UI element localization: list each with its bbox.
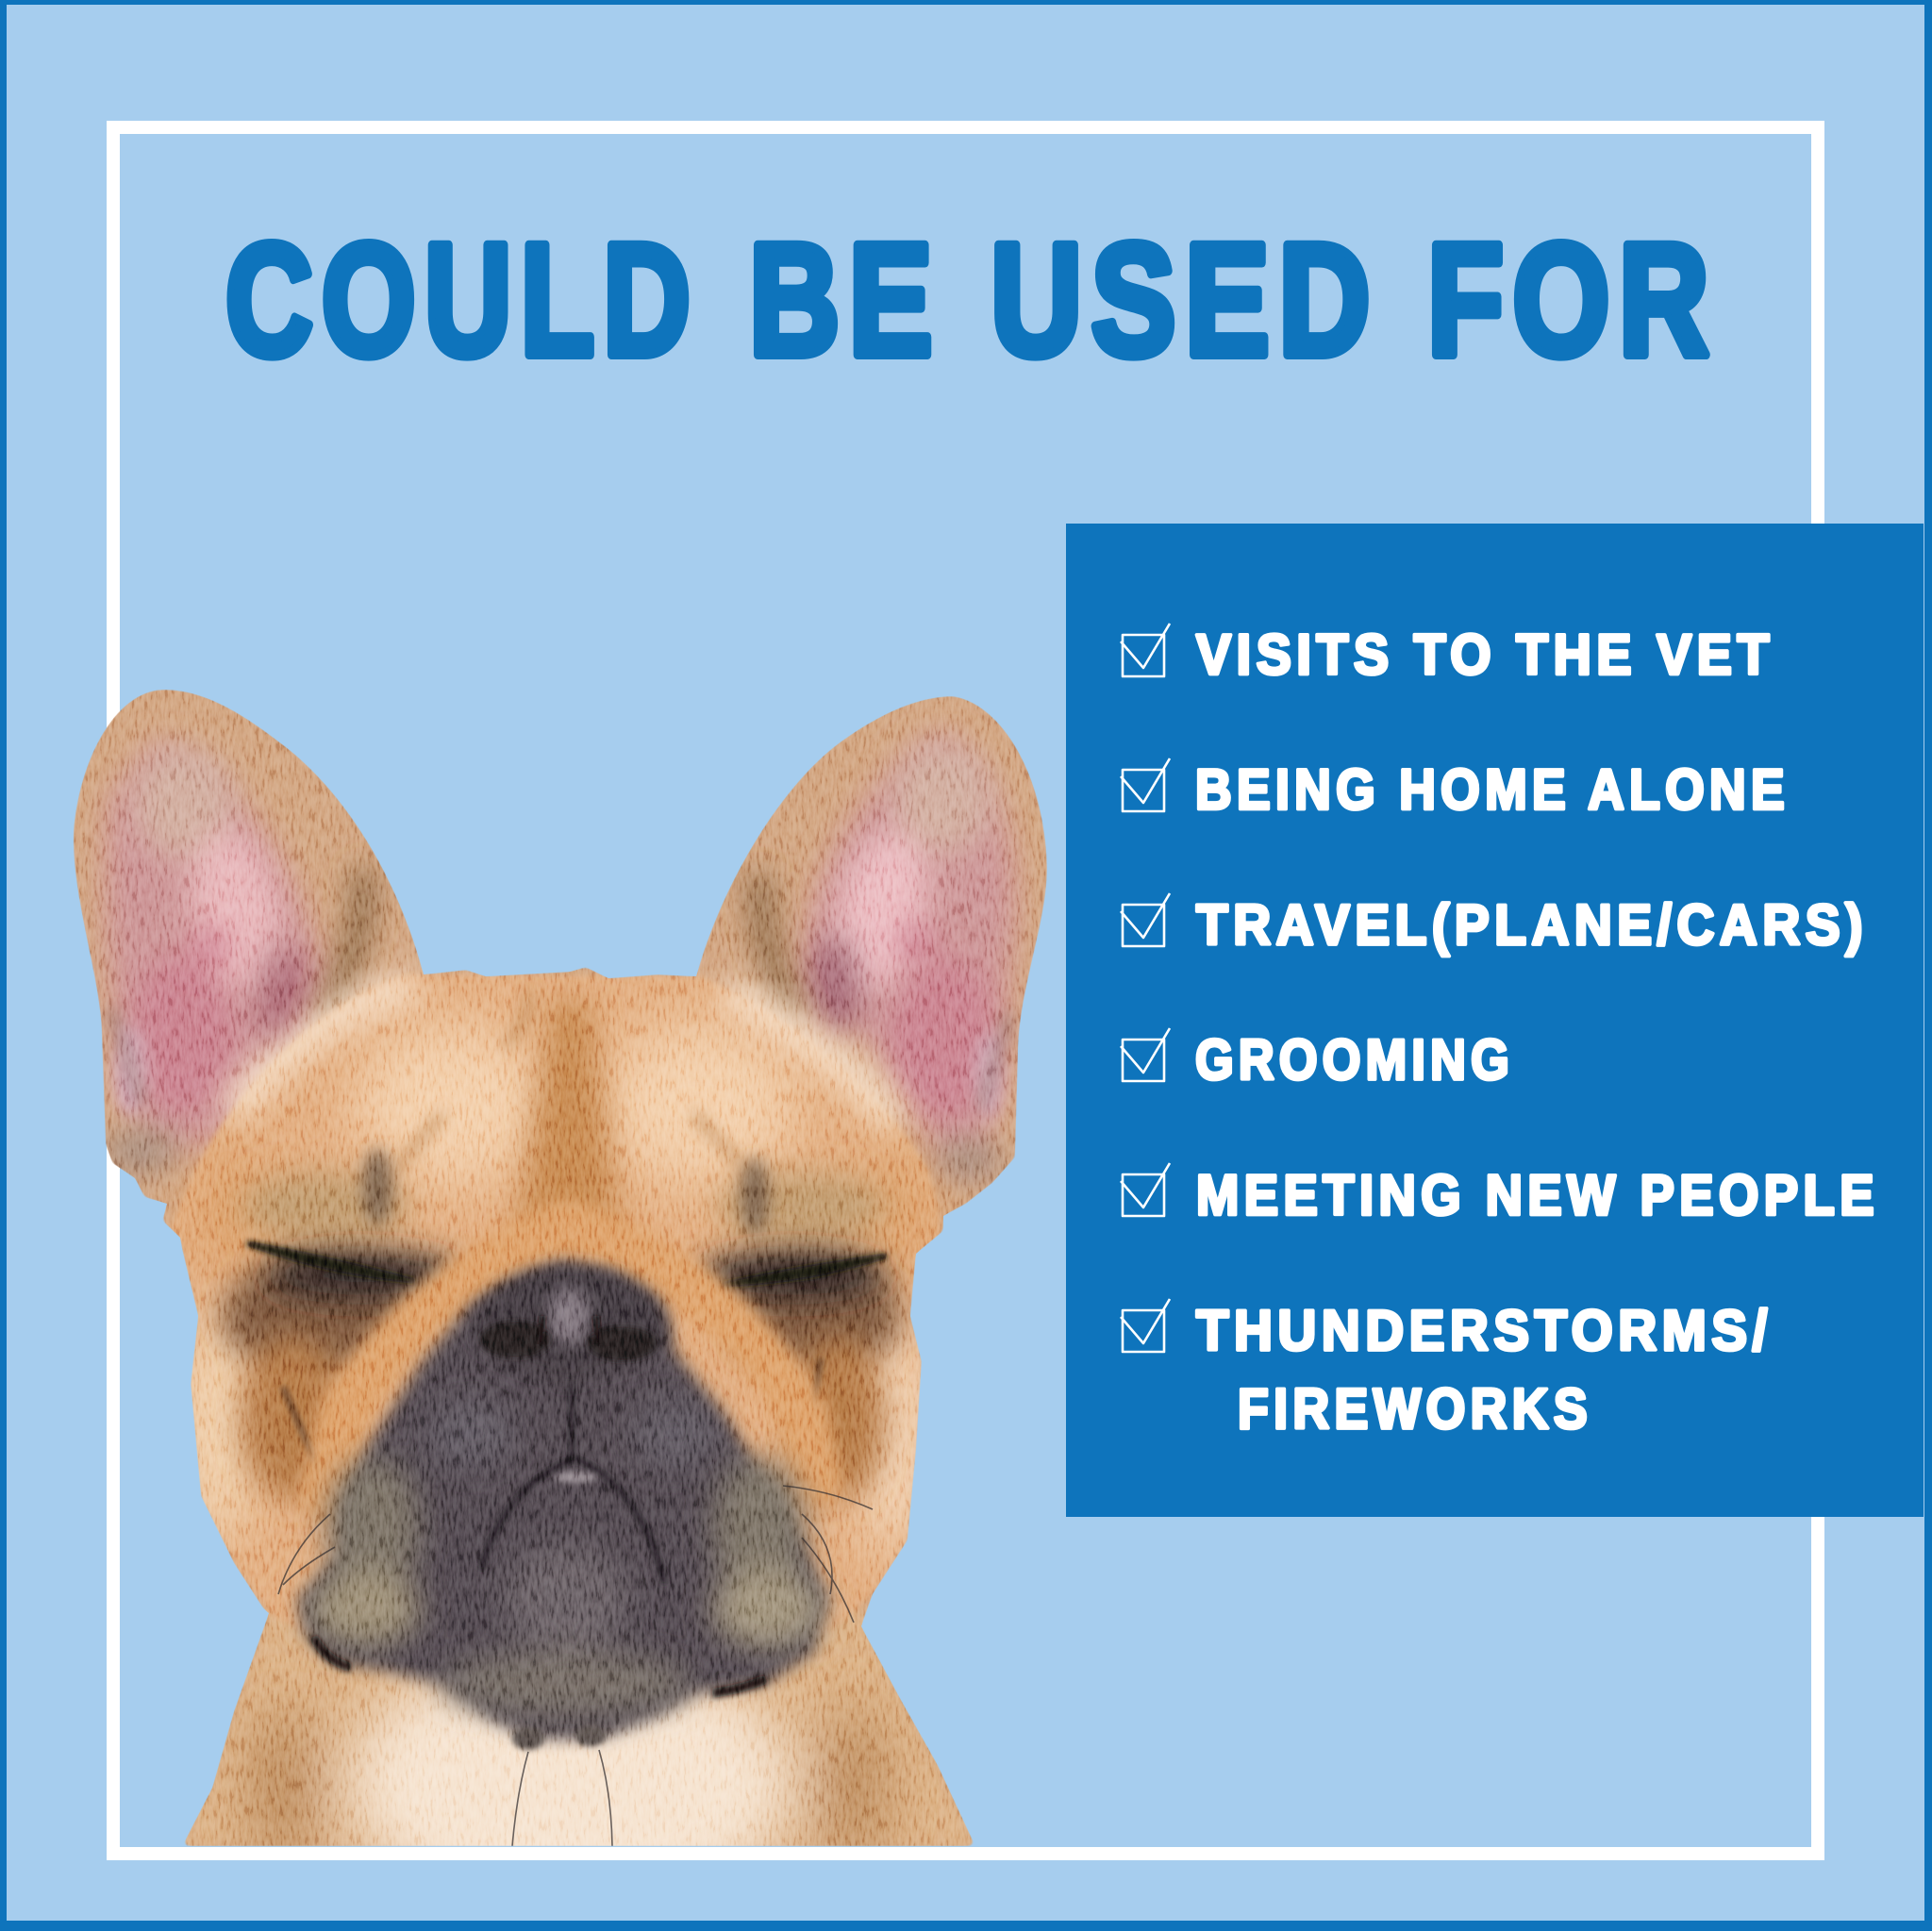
- checklist item: visits to the vet: VISITS TO THE VET: [1196, 623, 1774, 687]
- title: [225, 210, 1718, 389]
- mouth line: [481, 1379, 665, 1585]
- title: BE: [749, 210, 941, 389]
- checklist item: being home alone: BEING HOME ALONE: [1195, 758, 1790, 821]
- title: COULD: [225, 210, 699, 389]
- checklist item: thunderstorms and fireworks: FIREWORKS: [1238, 1377, 1592, 1440]
- white inner frame: [113, 127, 1818, 1854]
- title: USED: [991, 210, 1379, 389]
- fur texture: [57, 660, 1057, 1849]
- checklist item: thunderstorms and fireworks: [1121, 1299, 1773, 1440]
- checklist item: travel: TRAVEL(PLANE/CARS): [1196, 893, 1868, 957]
- dog base fur: [57, 660, 1057, 1849]
- lip highlight: [555, 1472, 596, 1483]
- blue checklist panel: [1066, 524, 1924, 1517]
- grey tan jowls: [307, 1401, 825, 1716]
- whiskers and chin hairs: [278, 1486, 873, 1846]
- neck and chest: [189, 1611, 971, 1846]
- muzzle: [298, 1262, 829, 1750]
- title: FOR: [1427, 210, 1718, 389]
- nose: [471, 1264, 670, 1387]
- forehead centre stripe: [514, 1000, 623, 1245]
- checklist item: thunderstorms and fireworks: THUNDERSTORMS/: [1196, 1299, 1773, 1362]
- chin spots: [512, 1725, 606, 1750]
- right eye area: [698, 1158, 901, 1500]
- checklist item: meeting new people: MEETING NEW PEOPLE: [1196, 1164, 1879, 1226]
- orange muzzle folds: [325, 1226, 816, 1495]
- wrinkle fold: [396, 990, 745, 1170]
- jowl shadows: [313, 1637, 766, 1693]
- forehead rim highlight: [231, 986, 896, 1123]
- right ear: [759, 731, 1018, 1183]
- left eye area: [222, 1149, 462, 1500]
- dog photo illustration: [74, 690, 1047, 1846]
- checklist item: grooming: GROOMING: [1195, 1028, 1514, 1091]
- left ear: [102, 741, 363, 1175]
- head: [169, 974, 939, 1632]
